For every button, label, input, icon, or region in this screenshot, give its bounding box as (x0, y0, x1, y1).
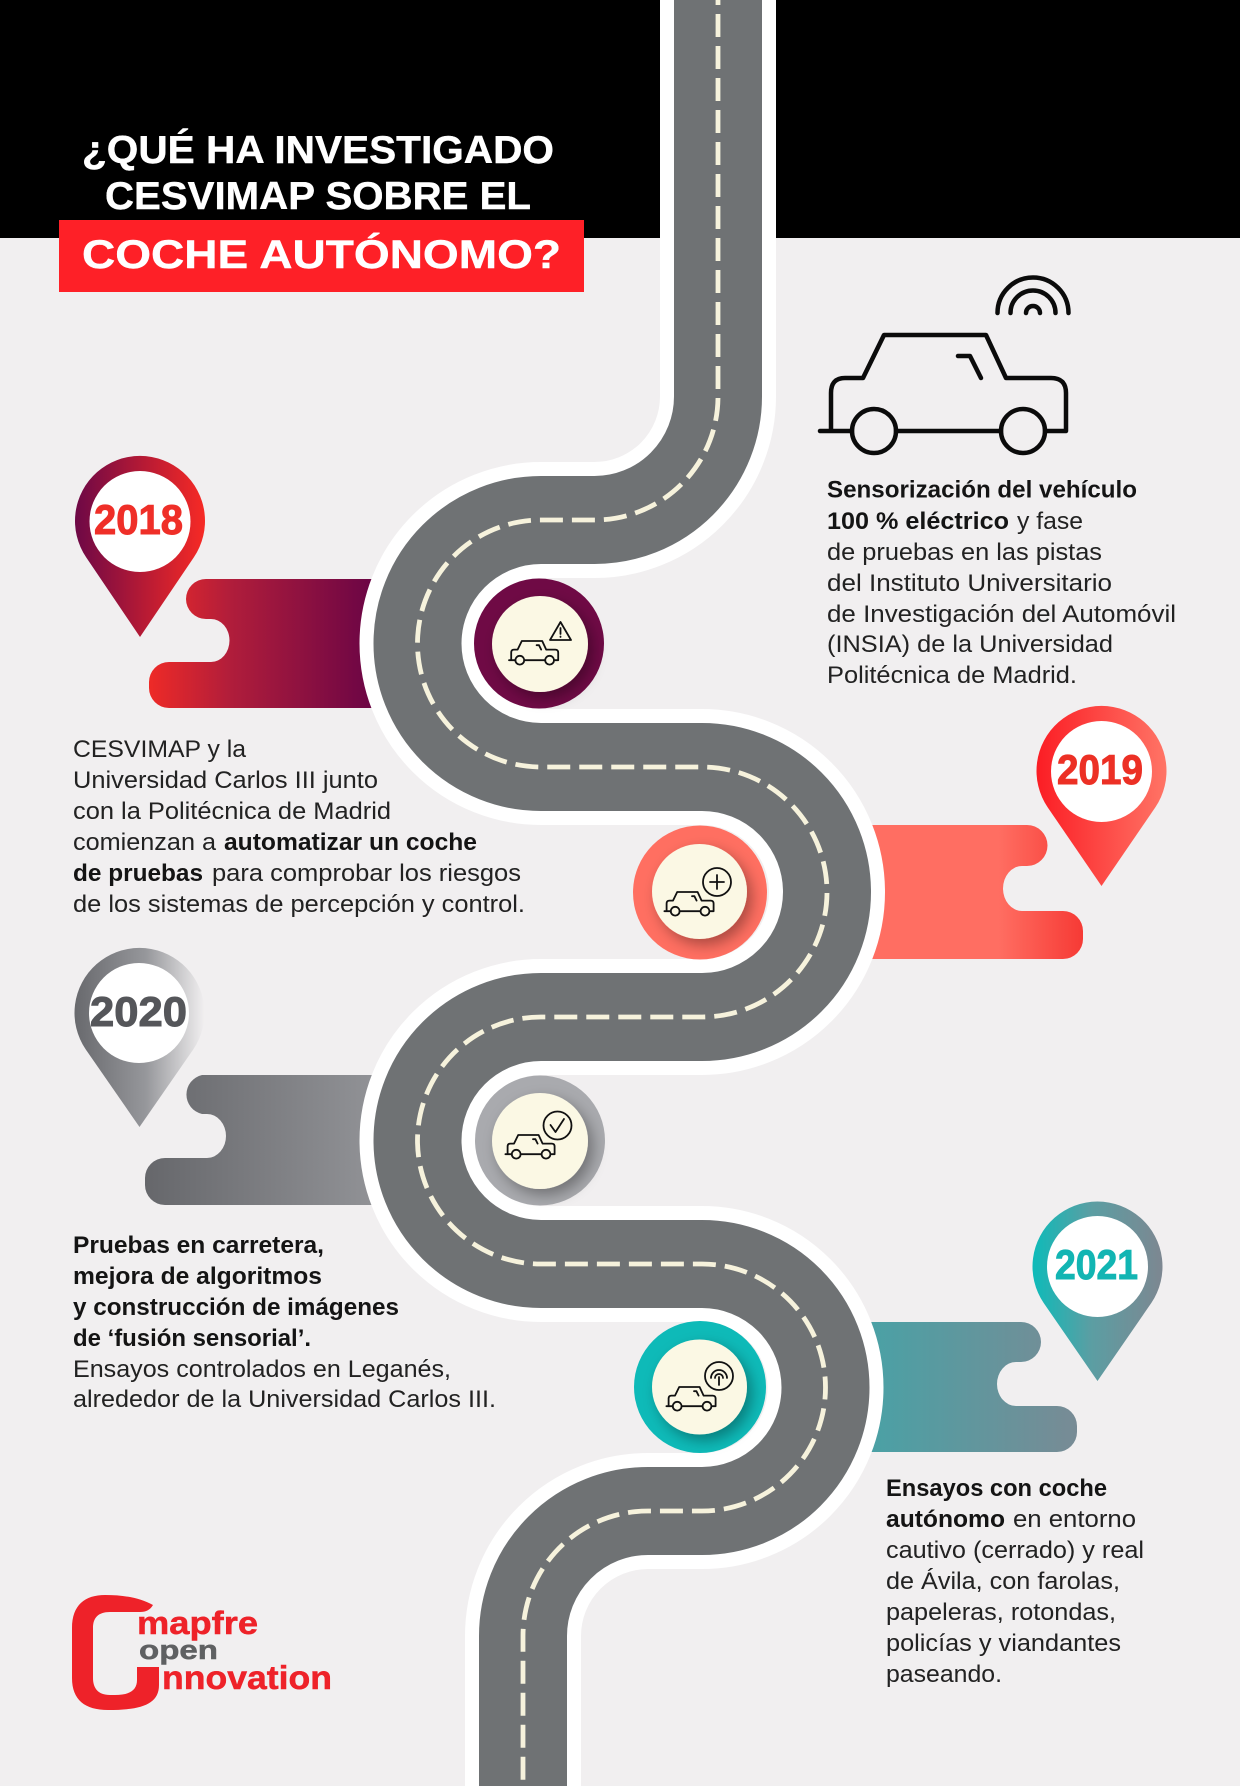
text: 2018 description: con la Politécnica de Madrid (73, 798, 391, 825)
text: 100% electric vehicle: 100 % eléctrico (827, 508, 1009, 535)
text: 2018 description: de los sistemas de percepción y control. (73, 891, 525, 918)
text: 2020 description: alrededor de la Universidad Carlos III. (73, 1386, 496, 1413)
bar: 2019 connector (860, 825, 1083, 959)
pin: 2020 (74, 948, 204, 1127)
text: 2020 description (73, 1232, 496, 1413)
logo: mapfre open innovation: mapfre (137, 1605, 258, 1641)
title (59, 128, 584, 292)
text: 2021 description: policías y viandantes (886, 1630, 1121, 1657)
medallion: 2021 connected car (634, 1321, 766, 1453)
text: 100% electric vehicle: (INSIA) de la Universidad (827, 631, 1113, 658)
medallion: 2019 add car (633, 826, 767, 960)
text: 100% electric vehicle: y fase (1017, 508, 1083, 535)
pin: 2021: 2021 (1055, 1241, 1138, 1288)
text: 2021 description: papeleras, rotondas, (886, 1599, 1116, 1626)
text: 100% electric vehicle: Sensorización del vehículo (827, 476, 1137, 504)
logo: mapfre open innovation: open (139, 1635, 218, 1665)
text: 2018 description: para comprobar los riesgos (212, 860, 521, 887)
text: 2020 description: y construcción de imágenes (73, 1294, 399, 1321)
text: 2021 description: de Ávila, con farolas, (886, 1568, 1120, 1595)
title: COCHE AUTÓNOMO? (82, 231, 561, 277)
text: 100% electric vehicle: de pruebas en las pistas (827, 539, 1102, 566)
text: 2020 description: Pruebas en carretera, (73, 1232, 324, 1259)
text: 2018 description: comienzan a (73, 829, 217, 856)
text: 100% electric vehicle (827, 476, 1176, 689)
text: 100% electric vehicle: de Investigación del Automóvil (827, 601, 1176, 628)
text: 2018 description: Universidad Carlos III junto (73, 767, 378, 794)
pin: 2021 (1033, 1202, 1162, 1381)
text: 2021 description: cautivo (cerrado) y real (886, 1537, 1144, 1564)
text: 2018 description: CESVIMAP y la (73, 736, 247, 763)
road: winding road with dashed centre line (418, 0, 827, 1786)
icon: connected car with signal (820, 278, 1068, 453)
pin: 2018: 2018 (94, 496, 183, 543)
text: 2020 description: Ensayos controlados en Leganés, (73, 1356, 451, 1383)
text: 2018 description (73, 736, 525, 918)
text: 2020 description: de ‘fusión sensorial’. (73, 1325, 311, 1352)
text: 2018 description: automatizar un coche (224, 829, 477, 856)
logo: mapfre open innovation (72, 1595, 332, 1710)
text: 2021 description: paseando. (886, 1661, 1002, 1688)
medallion: 2020 check car (475, 1076, 605, 1206)
text: 2020 description: mejora de algoritmos (73, 1263, 322, 1290)
text: 2021 description: autónomo (886, 1506, 1005, 1533)
logo: mapfre open innovation: nnovation (162, 1659, 332, 1696)
text: 2021 description: Ensayos con coche (886, 1475, 1107, 1502)
bar: 2021 connector (860, 1322, 1077, 1452)
text: 2021 description: en entorno (1013, 1506, 1136, 1533)
medallion: 2018 warning car (474, 578, 604, 708)
bar: 2018 connector (149, 579, 385, 708)
text: 100% electric vehicle: Politécnica de Madrid. (827, 662, 1077, 689)
text: 2018 description: de pruebas (73, 860, 203, 887)
pin: 2020: 2020 (90, 988, 187, 1035)
pin: 2019: 2019 (1057, 746, 1143, 793)
text: 2021 description (886, 1475, 1144, 1688)
pin: 2019 (1037, 706, 1166, 886)
title: ¿QUÉ HA INVESTIGADO (82, 128, 554, 172)
bar: 2020 connector (145, 1075, 385, 1205)
pin: 2018 (75, 456, 205, 637)
text: 100% electric vehicle: del Instituto Universitario (827, 570, 1112, 597)
title: CESVIMAP SOBRE EL (105, 175, 531, 218)
